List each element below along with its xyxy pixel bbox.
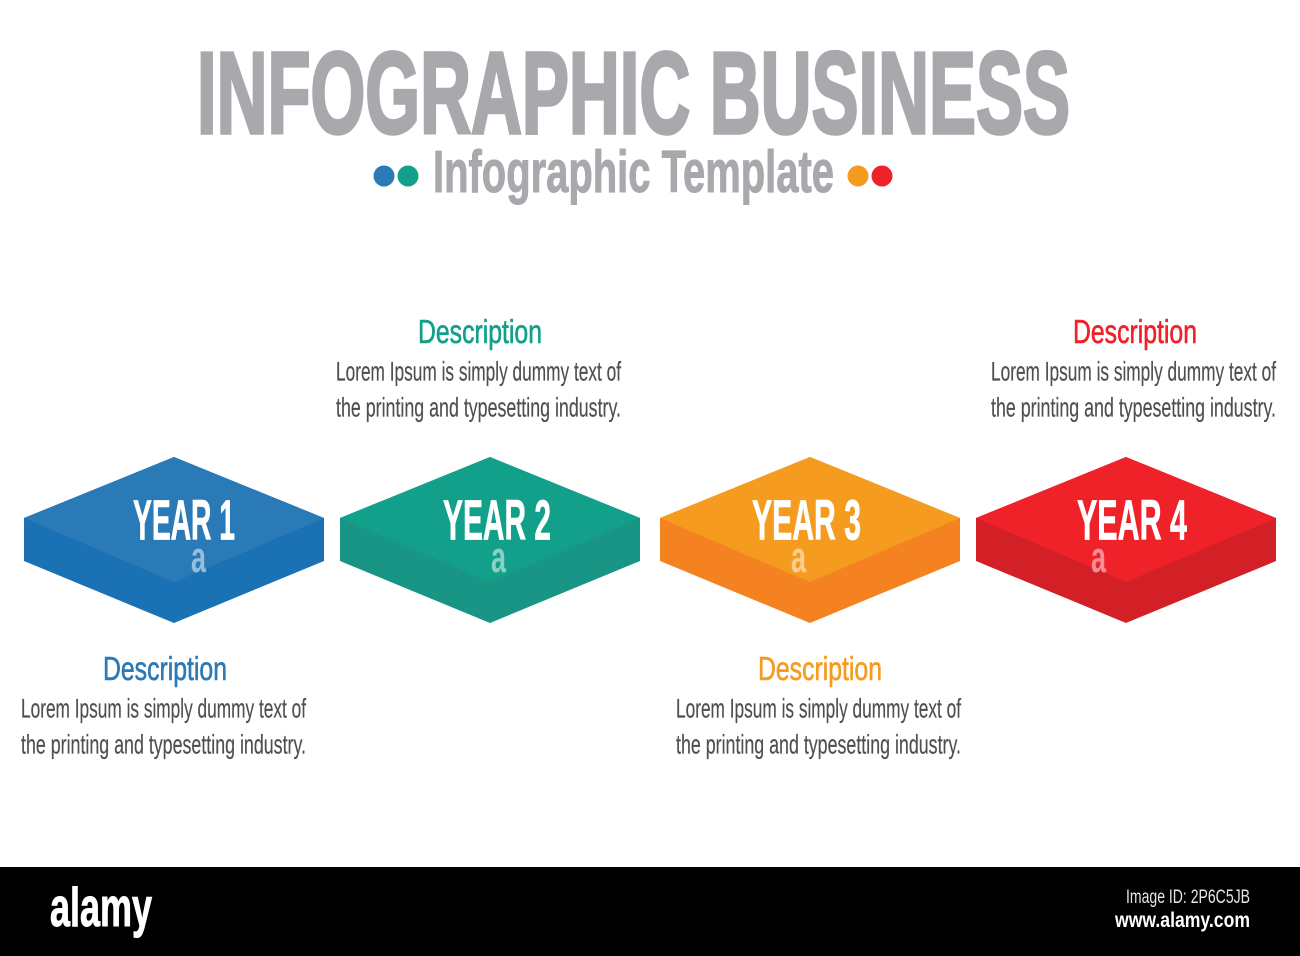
footer bar — [0, 867, 1300, 956]
text block: year 2 description: the printing and typesetting industry. — [336, 392, 621, 422]
panel: year 1 block — [24, 457, 324, 623]
panel: year 2 block: a — [491, 533, 506, 582]
text block: year 1 description: the printing and typesetting industry. — [21, 730, 306, 760]
subtitle row — [374, 139, 892, 205]
text block: year 1 description: Lorem Ipsum is simply dummy text of — [21, 694, 306, 724]
text block: year 3 description — [676, 650, 961, 760]
text block: year 3 description: Description — [758, 650, 882, 687]
text block: year 2 description: Lorem Ipsum is simply dummy text of — [336, 356, 621, 386]
panel: year 2 block — [340, 457, 640, 623]
panel: year 1 block: YEAR 1 — [133, 488, 235, 552]
panel: year 4 block: YEAR 4 — [1077, 488, 1187, 552]
text block: year 1 description — [21, 650, 306, 760]
text block: year 2 description: Description — [418, 313, 542, 350]
footer logo: alamy — [50, 876, 152, 938]
panel: year 2 block: YEAR 2 — [443, 488, 551, 552]
footer url: www.alamy.com — [1114, 909, 1250, 932]
panel: year 1 block: a — [191, 533, 206, 582]
text block: year 3 description: the printing and typesetting industry. — [676, 730, 961, 760]
panel: year 4 block — [976, 457, 1276, 623]
icon: orange and red dots — [848, 166, 892, 186]
text block: year 3 description: Lorem Ipsum is simply dummy text of — [676, 694, 961, 724]
panel: year 4 block: a — [1091, 533, 1106, 582]
text block: year 1 description: Description — [103, 650, 227, 687]
panel: year 3 block: a — [791, 533, 806, 582]
subtitle text: Infographic Template — [433, 139, 834, 205]
text block: year 4 description — [991, 313, 1276, 422]
text block: year 2 description — [336, 313, 621, 422]
icon: blue and green dots — [374, 166, 418, 186]
text block: year 4 description: Description — [1073, 313, 1197, 350]
panel: year 3 block: YEAR 3 — [752, 488, 861, 552]
panel: year 3 block — [660, 457, 960, 623]
footer image id: Image ID: 2P6C5JB — [1126, 887, 1250, 908]
